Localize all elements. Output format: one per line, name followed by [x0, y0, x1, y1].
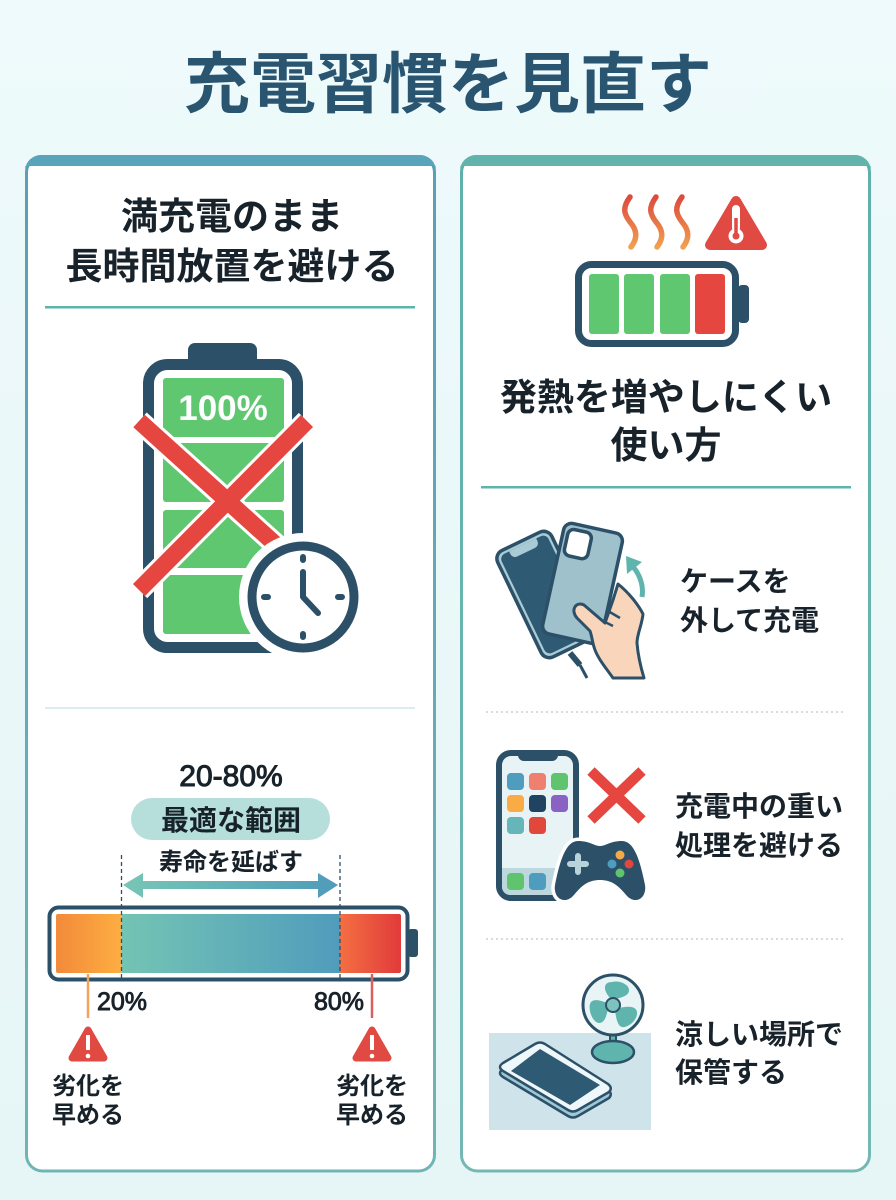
- text: store in cool place: 保管する: [675, 1057, 787, 1088]
- text: remove case: 外して充電: [680, 605, 819, 636]
- text: degrade right: 早める: [336, 1102, 408, 1129]
- text: degrade left: 劣化を: [52, 1073, 124, 1100]
- heading: full charge: 満充電のまま: [121, 196, 343, 237]
- text: avoid heavy tasks: 充電中の重い: [675, 791, 843, 822]
- panel: left card: [25, 155, 436, 1171]
- text: avoid heavy tasks: 処理を避ける: [675, 830, 843, 861]
- label: 20%: 20%: [97, 988, 147, 1016]
- text: degrade right: 劣化を: [336, 1073, 408, 1100]
- icon: warning right: [356, 1030, 388, 1058]
- text: avoid heavy tasks: [675, 791, 843, 861]
- icon: phone and fan: [489, 975, 651, 1130]
- heading: full charge: 長時間放置を避ける: [66, 246, 398, 287]
- text: degrade left: 早める: [52, 1102, 124, 1129]
- icon: remove case: [494, 522, 644, 678]
- pill: optimal range: 最適な範囲: [161, 805, 301, 836]
- icon: warning left: [72, 1030, 104, 1058]
- icon: clock: [239, 533, 367, 661]
- pill: optimal range: [131, 798, 330, 840]
- text: remove case: ケースを: [680, 566, 791, 597]
- heading: heat: 発熱を増やしにくい: [500, 377, 832, 418]
- text: remove case: [680, 566, 819, 636]
- heading: full charge: [66, 196, 398, 287]
- text: store in cool place: 涼しい場所で: [675, 1019, 843, 1050]
- title: 充電習慣を見直す: [184, 47, 712, 121]
- heading: heat: 使い方: [610, 425, 722, 466]
- text: degrade right: [336, 1073, 408, 1129]
- icon: full battery with cross and clock: [139, 343, 367, 661]
- label: extend lifespan: 寿命を延ばす: [159, 849, 303, 876]
- label: 100%: 100%: [178, 389, 268, 428]
- icon: hot battery: [578, 197, 762, 344]
- battery bar: [50, 908, 418, 980]
- label: 20-80%: 20-80%: [179, 760, 283, 793]
- panel: right card: [460, 155, 871, 1171]
- icon: phone and game controller: [499, 752, 645, 900]
- arrow: range: [123, 873, 338, 898]
- text: store in cool place: [675, 1019, 843, 1088]
- text: degrade left: [52, 1073, 124, 1129]
- label: 80%: 80%: [314, 988, 364, 1016]
- heading: heat: [500, 377, 832, 466]
